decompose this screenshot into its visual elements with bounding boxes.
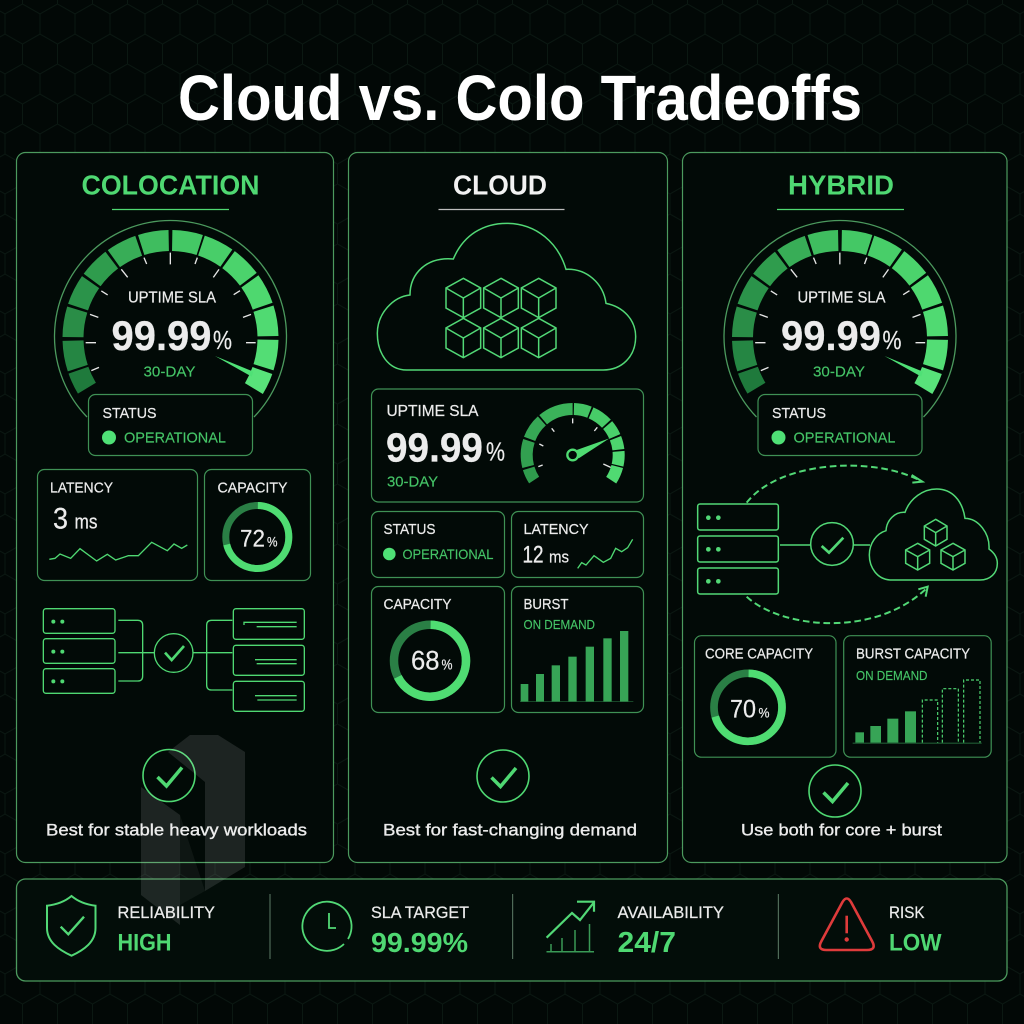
uptime gauge — [34, 202, 307, 474]
sla target stat: 99.99% — [371, 927, 468, 958]
uptime card: % — [486, 436, 505, 466]
mini gauge — [508, 390, 638, 520]
heading: cloud: CLOUD — [453, 170, 547, 200]
uptime card: UPTIME SLA — [386, 403, 479, 420]
verdict: cloud: Best for fast-changing demand — [383, 820, 637, 840]
latency card: ms — [549, 548, 569, 566]
status card: STATUS — [384, 522, 436, 538]
uptime gauge: 30-DAY — [144, 364, 196, 380]
check badge — [809, 765, 861, 817]
check badge — [477, 750, 529, 802]
uptime card: 30-DAY — [387, 474, 438, 490]
uptime gauge: 99.99 — [781, 312, 881, 359]
capacity card: % — [267, 534, 278, 550]
server to service diagram — [43, 609, 304, 711]
status card — [372, 512, 504, 578]
latency card: ms — [74, 512, 98, 534]
uptime gauge: % — [213, 325, 232, 355]
capacity card — [372, 586, 504, 712]
availability stat: AVAILABILITY — [618, 904, 724, 922]
sla target stat — [302, 902, 469, 958]
panel: colocation — [16, 152, 334, 862]
status box: STATUS — [102, 405, 156, 422]
heading: colocation: COLOCATION — [82, 170, 260, 200]
capacity card — [204, 470, 310, 580]
status box: OPERATIONAL — [794, 430, 896, 446]
icon: clock — [302, 902, 352, 951]
risk stat — [820, 898, 942, 956]
icon: rising chart — [546, 902, 594, 952]
sla target stat: SLA TARGET — [371, 904, 469, 922]
heading: hybrid: HYBRID — [788, 170, 894, 200]
availability stat — [546, 902, 724, 959]
hybrid server to cloud diagram — [698, 466, 997, 623]
availability stat: 24/7 — [618, 927, 676, 959]
burst capacity card — [844, 636, 991, 757]
burst capacity card: ON DEMAND — [856, 668, 928, 683]
latency card: LATENCY — [50, 480, 113, 496]
panel: cloud — [348, 152, 668, 862]
capacity card: CAPACITY — [384, 597, 452, 613]
status box — [88, 394, 252, 456]
latency card: 12 — [522, 542, 544, 568]
capacity card: % — [442, 656, 452, 674]
status card: OPERATIONAL — [402, 546, 494, 562]
icon: warning triangle — [820, 898, 874, 950]
uptime card: 99.99 — [386, 424, 483, 470]
icon: shield — [47, 896, 96, 956]
status box: OPERATIONAL — [124, 430, 226, 446]
core capacity card: 70 — [730, 695, 756, 723]
status box — [758, 394, 922, 456]
logo watermark — [141, 735, 245, 925]
core capacity card — [694, 636, 836, 757]
uptime gauge: 30-DAY — [813, 364, 865, 380]
burst card — [512, 586, 644, 712]
capacity card: 68 — [411, 646, 440, 676]
burst capacity card: BURST CAPACITY — [856, 646, 970, 662]
core capacity card: % — [758, 704, 770, 720]
verdict: hybrid: Use both for core + burst — [741, 820, 942, 840]
capacity card: CAPACITY — [218, 480, 288, 496]
reliability stat: RELIABILITY — [118, 904, 215, 922]
title: Cloud vs. Colo Tradeoffs — [178, 62, 862, 134]
status box: STATUS — [772, 405, 826, 422]
latency card: LATENCY — [524, 522, 589, 538]
icon: cloud with cubes — [377, 223, 636, 370]
uptime gauge — [704, 202, 976, 474]
latency card — [38, 470, 198, 580]
panel: hybrid — [682, 152, 1007, 862]
uptime gauge: % — [882, 325, 902, 355]
reliability stat — [47, 896, 215, 956]
core capacity card: CORE CAPACITY — [705, 646, 813, 662]
uptime gauge: UPTIME SLA — [128, 290, 217, 306]
latency card: 3 — [53, 502, 68, 536]
reliability stat: HIGH — [118, 930, 172, 956]
check badge — [143, 750, 195, 802]
risk stat: RISK — [889, 904, 924, 922]
panel: summary strip — [16, 879, 1007, 981]
verdict: colocation: Best for stable heavy workloads — [46, 820, 307, 840]
uptime gauge: 99.99 — [112, 312, 212, 359]
burst card: ON DEMAND — [524, 617, 595, 632]
risk stat: LOW — [889, 930, 942, 956]
burst card: BURST — [524, 597, 569, 613]
latency card — [512, 512, 644, 578]
uptime card — [372, 389, 644, 520]
uptime gauge: UPTIME SLA — [798, 290, 886, 306]
capacity card: 72 — [240, 526, 265, 552]
